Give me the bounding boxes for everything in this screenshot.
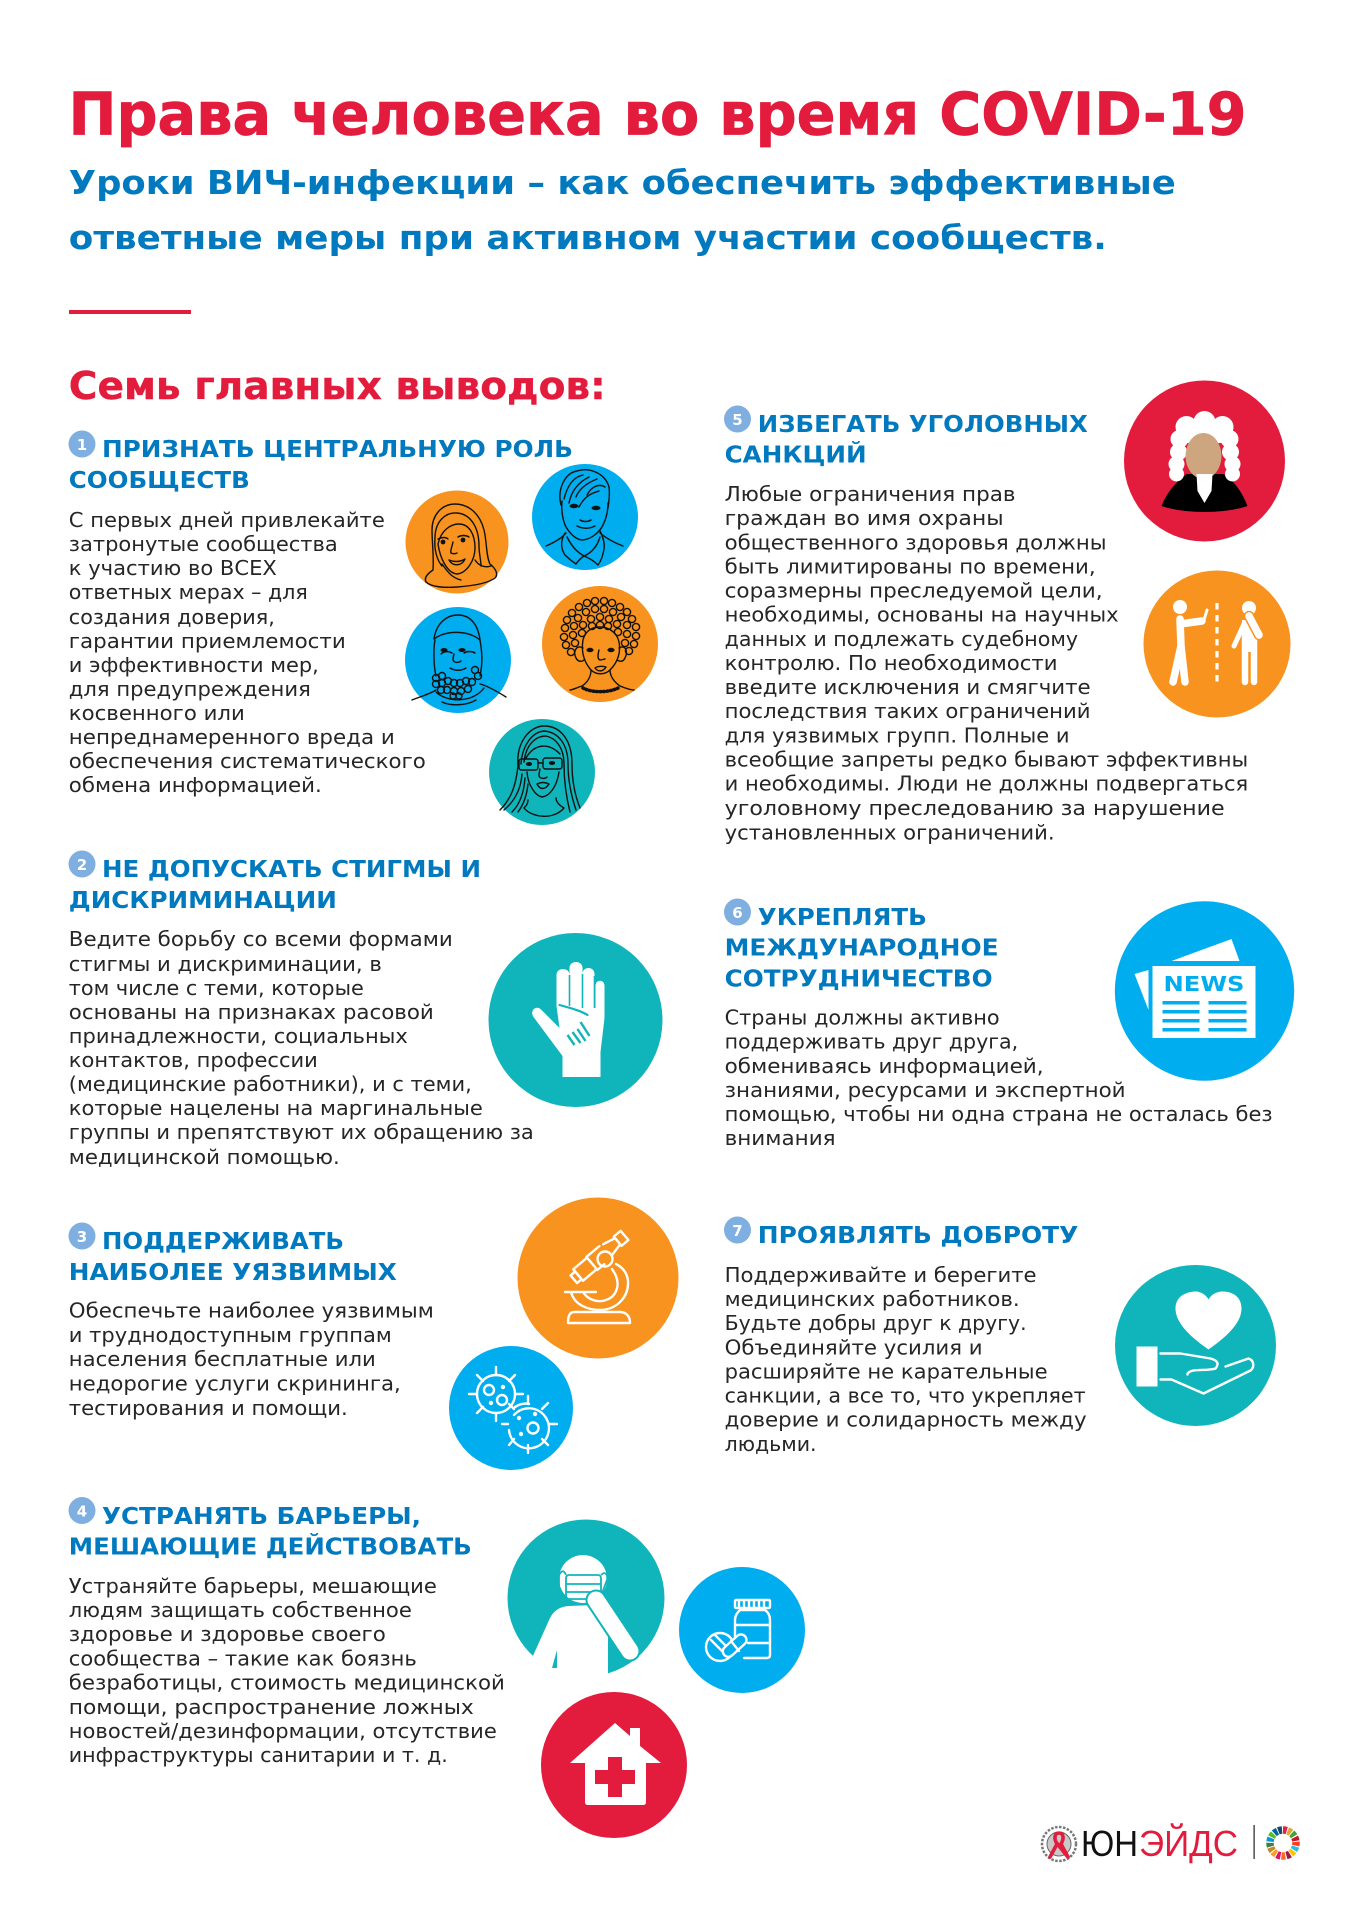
body text 6: поддерживать друг друга, bbox=[725, 1030, 1018, 1054]
body text 1: и эффективности мер, bbox=[69, 653, 319, 677]
body text 6 bbox=[725, 1006, 1273, 1150]
body text 1 bbox=[69, 508, 426, 797]
body text 2: принадлежности, социальных bbox=[69, 1024, 408, 1048]
body text 6: Страны должны активно bbox=[725, 1006, 1000, 1030]
body text 6: обмениваясь информацией, bbox=[725, 1054, 1044, 1078]
body text 3: Обеспечьте наиболее уязвимым bbox=[69, 1298, 434, 1322]
body text 7: Объединяйте усилия и bbox=[725, 1336, 983, 1360]
panel: takeaway 6 bbox=[724, 898, 1294, 1150]
icon: physical distancing figures bbox=[1144, 570, 1290, 718]
number badge 2: 2 bbox=[77, 856, 87, 874]
body text 3: и труднодоступным группам bbox=[69, 1323, 392, 1347]
body text 1: ответных мерах – для bbox=[69, 580, 308, 604]
heading 4 bbox=[69, 1504, 472, 1560]
body text 7: людьми. bbox=[725, 1432, 817, 1456]
wordmark: ЮН bbox=[1081, 1823, 1138, 1864]
body text 4: сообщества – такие как боязнь bbox=[69, 1646, 417, 1670]
heading: seven key takeaways: Семь главных выводов: bbox=[69, 364, 606, 408]
body text 5: быть лимитированы по времени, bbox=[725, 554, 1096, 578]
number badge 6 bbox=[724, 898, 751, 926]
body text 5: и необходимы. Люди не должны подвергаться bbox=[725, 772, 1248, 796]
panel: takeaway 4 bbox=[68, 1497, 805, 1838]
number badge 5 bbox=[724, 406, 751, 432]
heading 3 bbox=[69, 1229, 397, 1286]
icon: pill bottle and tablets bbox=[679, 1567, 805, 1693]
SDG wheel bbox=[1265, 1825, 1301, 1861]
body text 4: здоровье и здоровье своего bbox=[69, 1622, 386, 1646]
body text 5: граждан во имя охраны bbox=[725, 506, 1004, 530]
icon: bearded man bbox=[405, 607, 511, 713]
body text 2: Ведите борьбу со всеми формами bbox=[69, 927, 453, 951]
number badge 4: 4 bbox=[77, 1502, 87, 1520]
body text 7: доверие и солидарность между bbox=[725, 1408, 1087, 1432]
heading 6 bbox=[725, 905, 999, 992]
panel: takeaway 7 bbox=[724, 1216, 1276, 1456]
logo: UNAIDS and SDG wheel bbox=[1042, 1822, 1301, 1864]
body text 1: косвенного или bbox=[69, 701, 245, 725]
body text 4: безработицы, стоимость медицинской bbox=[69, 1670, 505, 1694]
body text 4: новостей/дезинформации, отсутствие bbox=[69, 1719, 497, 1743]
heading 5: ИЗБЕГАТЬ УГОЛОВНЫХ bbox=[758, 412, 1088, 438]
heading 6: МЕЖДУНАРОДНОЕ bbox=[725, 936, 999, 962]
heading 1: ПРИЗНАТЬ ЦЕНТРАЛЬНУЮ РОЛЬ bbox=[102, 437, 573, 463]
panel: takeaway 1 bbox=[68, 430, 658, 825]
subtitle: Уроки ВИЧ-инфекции – как обеспечить эффективные bbox=[69, 163, 1176, 202]
body text 2: том числе с теми, которые bbox=[69, 976, 364, 1000]
body text 2 bbox=[69, 927, 534, 1169]
heading 3: ПОДДЕРЖИВАТЬ bbox=[102, 1229, 344, 1255]
body text 7: расширяйте не карательные bbox=[725, 1360, 1048, 1384]
heading 2: ДИСКРИМИНАЦИИ bbox=[69, 888, 337, 914]
body text 1: непреднамеренного вреда и bbox=[69, 725, 395, 749]
heading 2 bbox=[69, 857, 481, 914]
heading 6: СОТРУДНИЧЕСТВО bbox=[725, 966, 993, 992]
wordmark: ЭЙДС bbox=[1139, 1822, 1238, 1864]
body text 2: группы и препятствуют их обращению за bbox=[69, 1120, 534, 1144]
heading 1 bbox=[69, 437, 573, 494]
heading 2: НЕ ДОПУСКАТЬ СТИГМЫ И bbox=[102, 857, 481, 883]
icon: woman with glasses bbox=[489, 719, 595, 825]
body text 4: Устраняйте барьеры, мешающие bbox=[69, 1574, 437, 1598]
body text 5: уголовному преследованию за нарушение bbox=[725, 796, 1225, 820]
icon: woman in headscarf bbox=[406, 490, 508, 594]
body text 4 bbox=[69, 1574, 505, 1767]
body text 5: необходимы, основаны на научных bbox=[725, 603, 1119, 627]
body text 7: Поддерживайте и берегите bbox=[725, 1263, 1037, 1287]
body text 3: населения бесплатные или bbox=[69, 1347, 376, 1371]
number badge 2 bbox=[68, 850, 96, 878]
icon: house with red cross bbox=[541, 1692, 687, 1838]
icon: woman with curly hair bbox=[542, 586, 658, 702]
number badge 1 bbox=[68, 430, 96, 458]
body text 1: создания доверия, bbox=[69, 605, 275, 629]
body text 7 bbox=[725, 1263, 1087, 1456]
body text 6: помощью, чтобы ни одна страна не осталась без bbox=[725, 1102, 1273, 1126]
body text 5: установленных ограничений. bbox=[725, 820, 1055, 844]
body text 5: всеобщие запреты редко бывают эффективны bbox=[725, 748, 1248, 772]
body text 7: санкции, а все то, что укрепляет bbox=[725, 1384, 1086, 1408]
body text 1: для предупреждения bbox=[69, 677, 311, 701]
body text 1: обмена информацией. bbox=[69, 773, 322, 797]
body text 6: внимания bbox=[725, 1126, 836, 1150]
body text 4: людям защищать собственное bbox=[69, 1598, 412, 1622]
subtitle: ответные меры при активном участии сообществ. bbox=[69, 218, 1107, 257]
body text 2: которые нацелены на маргинальные bbox=[69, 1096, 483, 1120]
heading 7: ПРОЯВЛЯТЬ ДОБРОТУ bbox=[758, 1223, 1079, 1249]
body text 5: для уязвимых групп. Полные и bbox=[725, 723, 1070, 747]
body text 2: (медицинские работники), и с теми, bbox=[69, 1072, 472, 1096]
body text 1: затронутые сообщества bbox=[69, 532, 338, 556]
number badge 6: 6 bbox=[732, 904, 743, 922]
body text 1: С первых дней привлекайте bbox=[69, 508, 385, 532]
body text 2: контактов, профессии bbox=[69, 1048, 318, 1072]
heading 5: САНКЦИЙ bbox=[725, 440, 867, 468]
body text 7: Будьте добры друг к другу. bbox=[725, 1311, 1027, 1335]
subtitle bbox=[69, 163, 1176, 257]
title: Права человека во время COVID-19 bbox=[68, 80, 1246, 148]
number badge 3: 3 bbox=[77, 1228, 87, 1246]
body text 5: последствия таких ограничений bbox=[725, 699, 1091, 723]
icon: judge bbox=[1124, 380, 1285, 542]
number badge 4 bbox=[68, 1497, 96, 1524]
icon: newspaper: NEWS bbox=[1164, 972, 1244, 996]
icon: person coughing in mask bbox=[508, 1520, 664, 1682]
body text 1: к участию во ВСЕХ bbox=[69, 556, 277, 580]
heading 4: УСТРАНЯТЬ БАРЬЕРЫ, bbox=[102, 1504, 421, 1530]
body text 2: стигмы и дискриминации, в bbox=[69, 952, 382, 976]
body text 1: гарантии приемлемости bbox=[69, 629, 346, 653]
body text 3 bbox=[69, 1298, 434, 1420]
body text 2: основаны на признаках расовой bbox=[69, 1000, 434, 1024]
body text 5: контролю. По необходимости bbox=[725, 651, 1058, 675]
heading 1: СООБЩЕСТВ bbox=[69, 468, 250, 494]
heading 3: НАИБОЛЕЕ УЯЗВИМЫХ bbox=[69, 1260, 397, 1286]
icon: hands bbox=[488, 933, 662, 1107]
icon: newspaper bbox=[1115, 901, 1294, 1081]
body text 5: общественного здоровья должны bbox=[725, 530, 1107, 554]
icon: young man bbox=[532, 464, 638, 570]
UN emblem with red ribbon bbox=[1042, 1827, 1076, 1861]
number badge 1: 1 bbox=[77, 436, 87, 454]
body text 4: помощи, распространение ложных bbox=[69, 1695, 474, 1719]
panel: takeaway 2 bbox=[68, 850, 662, 1169]
number badge 7: 7 bbox=[732, 1222, 743, 1240]
icon: viruses bbox=[449, 1346, 573, 1470]
body text 5: введите исключения и смягчите bbox=[725, 675, 1091, 699]
body text 3: тестирования и помощи. bbox=[69, 1396, 348, 1420]
panel: takeaway 3 bbox=[68, 1198, 678, 1470]
icon: microscope bbox=[518, 1198, 678, 1358]
number badge 5: 5 bbox=[732, 411, 743, 429]
heading 6: УКРЕПЛЯТЬ bbox=[758, 905, 927, 931]
number badge 3 bbox=[68, 1222, 96, 1250]
heading 4: МЕШАЮЩИЕ ДЕЙСТВОВАТЬ bbox=[69, 1532, 472, 1560]
body text 5 bbox=[725, 482, 1248, 844]
panel: takeaway 5 bbox=[724, 380, 1290, 844]
body text 7: медицинских работников. bbox=[725, 1287, 1020, 1311]
body text 1: обеспечения систематического bbox=[69, 749, 426, 773]
body text 5: Любые ограничения прав bbox=[725, 482, 1016, 506]
body text 4: инфраструктуры санитарии и т. д. bbox=[69, 1743, 448, 1767]
heading 5 bbox=[725, 412, 1088, 468]
body text 3: недорогие услуги скрининга, bbox=[69, 1372, 401, 1396]
body text 2: медицинской помощью. bbox=[69, 1145, 340, 1169]
icon: heart in hand bbox=[1115, 1265, 1276, 1426]
number badge 7 bbox=[724, 1216, 751, 1244]
body text 5: данных и подлежать судебному bbox=[725, 627, 1078, 651]
body text 6: знаниями, ресурсами и экспертной bbox=[725, 1078, 1126, 1102]
body text 5: соразмерны преследуемой цели, bbox=[725, 578, 1103, 602]
